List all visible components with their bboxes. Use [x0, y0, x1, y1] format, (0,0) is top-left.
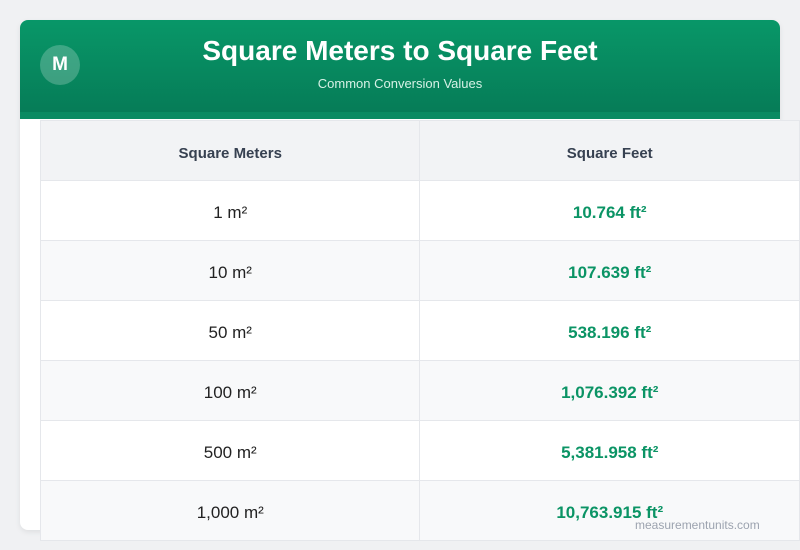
icon: logo M: M [52, 54, 68, 75]
conversion table: 500 m² [204, 442, 257, 462]
conversion table [40, 120, 800, 541]
icon: logo M [40, 45, 80, 85]
conversion table: 10.764 ft² [573, 202, 647, 222]
subtitle: Common Conversion Values [318, 76, 482, 91]
conversion table: 1 m² [213, 202, 247, 222]
conversion table: 10 m² [208, 262, 252, 282]
conversion table: Square Feet [567, 144, 653, 162]
conversion table: 1,000 m² [197, 502, 264, 522]
conversion table: Square Meters [179, 144, 282, 162]
conversion table: 1,076.392 ft² [561, 382, 658, 402]
conversion table: 5,381.958 ft² [561, 442, 658, 462]
conversion table: 538.196 ft² [568, 322, 651, 342]
conversion table: 10,763.915 ft² [556, 502, 663, 522]
conversion table: 50 m² [208, 322, 252, 342]
conversion table: 100 m² [204, 382, 257, 402]
header [20, 20, 780, 119]
title: Square Meters to Square Feet [202, 35, 598, 66]
conversion table: 107.639 ft² [568, 262, 651, 282]
watermark: measurementunits.com [635, 518, 760, 532]
